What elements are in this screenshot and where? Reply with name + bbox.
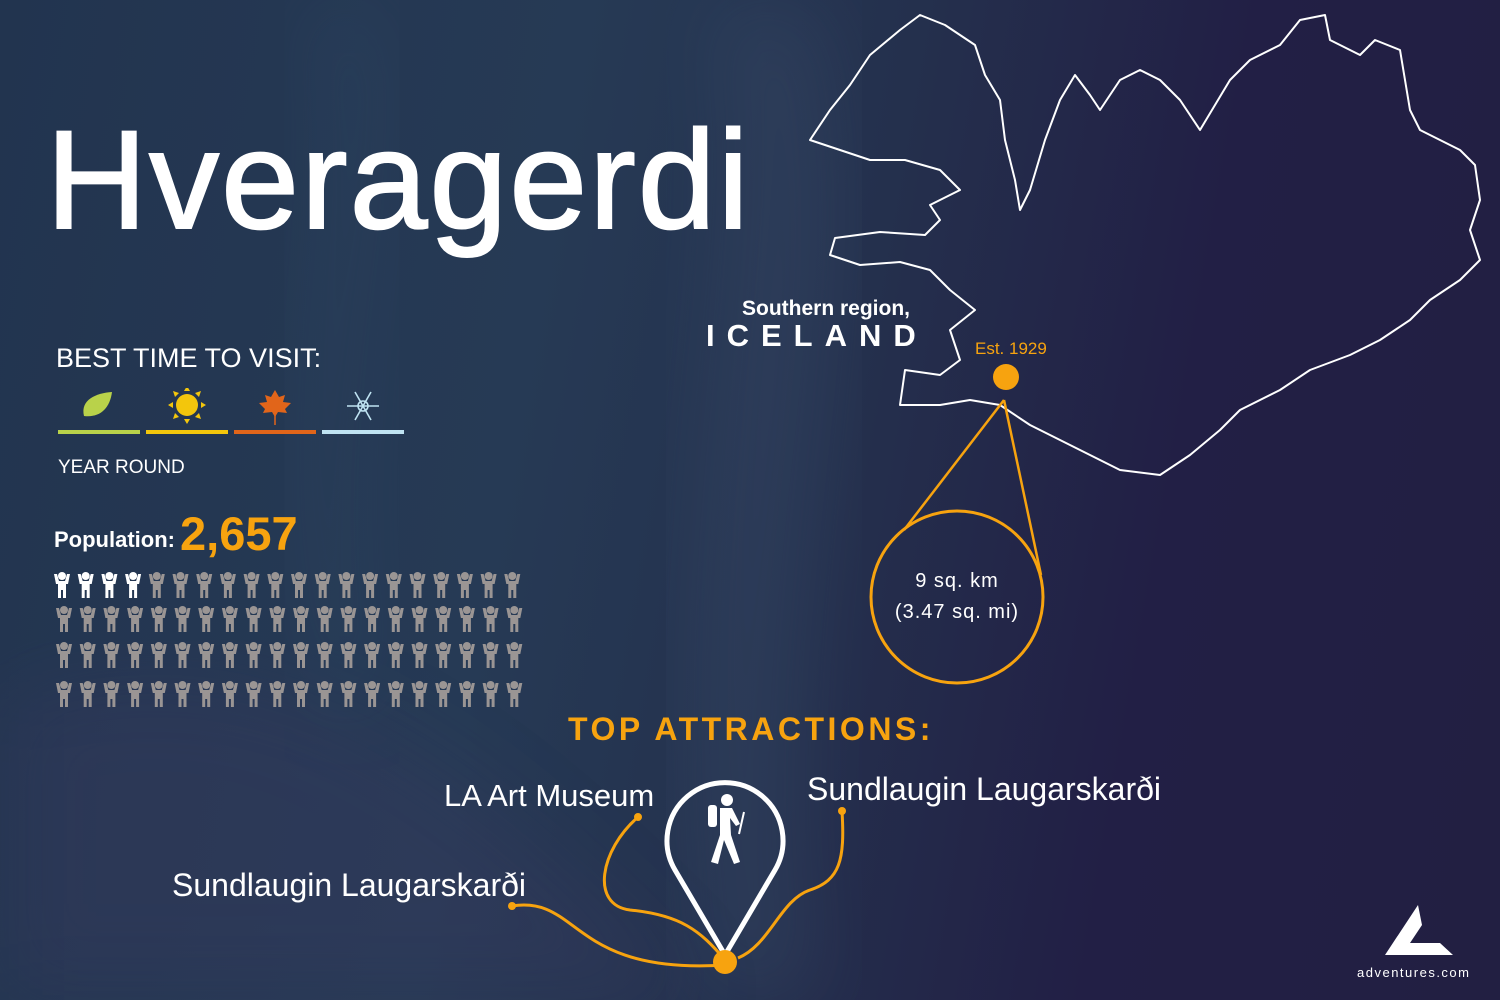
attraction labels: LA Art Museum bbox=[444, 778, 654, 813]
title: Hveragerdi bbox=[46, 101, 751, 258]
icon: leaf bbox=[83, 392, 112, 416]
area text: (3.47 sq. mi) bbox=[895, 601, 1019, 623]
est label: Est. 1929 bbox=[975, 339, 1047, 358]
logo: adventures.com bbox=[1357, 965, 1470, 980]
icon: sun bbox=[168, 386, 206, 424]
area text: 9 sq. km bbox=[915, 570, 999, 592]
text: Sundlaugin Laugarskarði bbox=[172, 867, 526, 903]
year round: YEAR ROUND bbox=[58, 457, 185, 478]
people pictogram bbox=[54, 572, 522, 707]
population label: Population: bbox=[54, 527, 175, 552]
iceland map bbox=[809, 14, 1481, 476]
icon: snowflake bbox=[347, 392, 379, 420]
population number: 2,657 bbox=[180, 507, 298, 560]
icon: maple leaf bbox=[259, 390, 291, 425]
top attractions heading: TOP ATTRACTIONS: bbox=[568, 711, 934, 747]
pin and connector curves bbox=[508, 780, 846, 974]
best time heading: BEST TIME TO VISIT: bbox=[56, 343, 321, 373]
region label: Southern region, bbox=[742, 297, 910, 320]
logo bbox=[1357, 905, 1470, 980]
seasons icons bbox=[58, 388, 404, 434]
area text bbox=[895, 570, 1019, 623]
area callout bbox=[870, 364, 1044, 684]
text: Sundlaugin Laugarskarði bbox=[807, 771, 1161, 807]
text: ICELAND bbox=[706, 318, 928, 353]
